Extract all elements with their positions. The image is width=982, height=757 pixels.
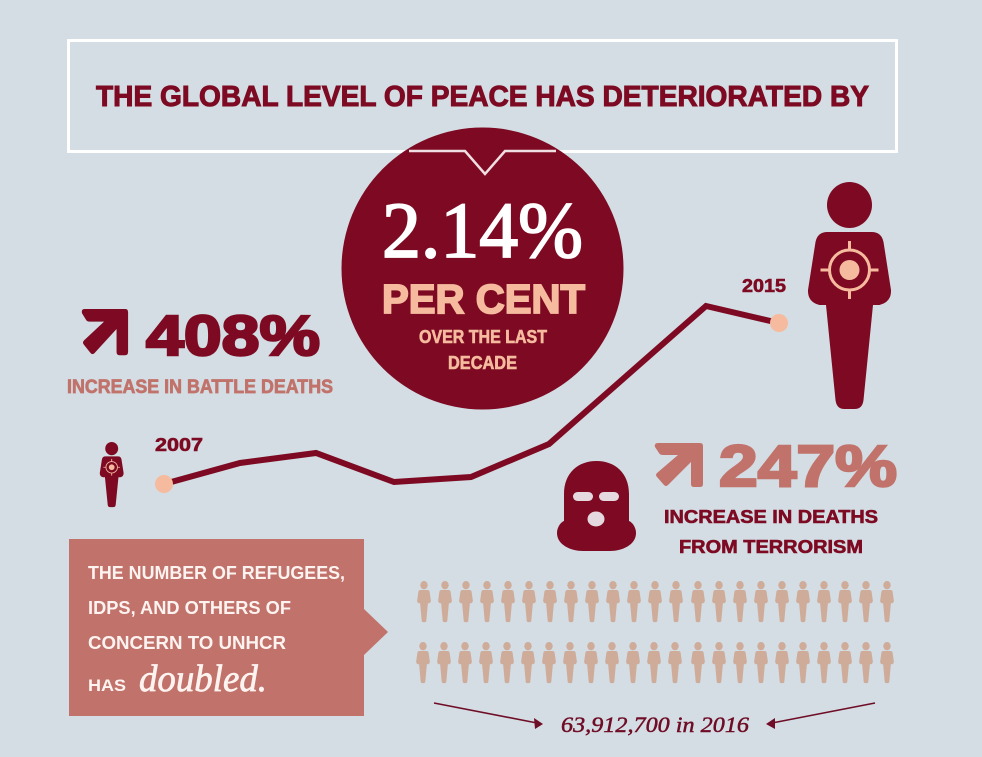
headline figure: 2.14%: [382, 188, 583, 275]
arrow: left pointing to total: [434, 703, 543, 729]
callout text: THE NUMBER OF REFUGEES,: [88, 562, 345, 583]
over the last decade: OVER THE LAST: [419, 327, 547, 347]
callout text: IDPS, AND OTHERS OF: [88, 597, 291, 618]
callout text: doubled.: [139, 658, 267, 700]
callout text: HAS: [88, 677, 126, 695]
panel: headline circle: [342, 128, 624, 410]
stat caption: INCREASE IN DEATHS: [664, 507, 878, 527]
icon row: people row one: [417, 581, 894, 622]
callout text: CONCERN TO UNHCR: [88, 632, 286, 653]
label 2015: 2015: [742, 276, 786, 296]
panel: title box: [68, 40, 896, 152]
stat number 408: 408%: [146, 304, 320, 368]
stat caption: FROM TERRORISM: [679, 537, 863, 557]
label 2007: 2007: [155, 435, 203, 455]
per cent label: PER CENT: [382, 276, 585, 322]
arrow: right pointing to total: [766, 703, 875, 729]
title: THE GLOBAL LEVEL OF PEACE HAS DETERIORATED BY: [96, 81, 869, 113]
stat number 247: 247%: [719, 434, 897, 499]
total label: 63,912,700 in 2016: [561, 712, 749, 737]
icon: large person with target: [808, 182, 891, 409]
stat: terrorism deaths: [655, 434, 897, 557]
over the last decade: DECADE: [448, 353, 517, 373]
callout: refugees: [69, 539, 388, 716]
stat caption: INCREASE IN BATTLE DEATHS: [67, 377, 333, 398]
icon: small person with target: [100, 442, 124, 507]
line chart: 2007 to 2015: [155, 276, 788, 493]
icon row: people row two: [416, 642, 894, 683]
callout text: [88, 562, 345, 700]
icon: balaclava: [557, 461, 636, 551]
icon: up arrow maroon: [82, 309, 128, 355]
stat: battle deaths: [67, 304, 333, 398]
icon: up arrow salmon: [655, 443, 703, 487]
over the last decade: [419, 327, 547, 373]
stat caption: [664, 507, 878, 557]
